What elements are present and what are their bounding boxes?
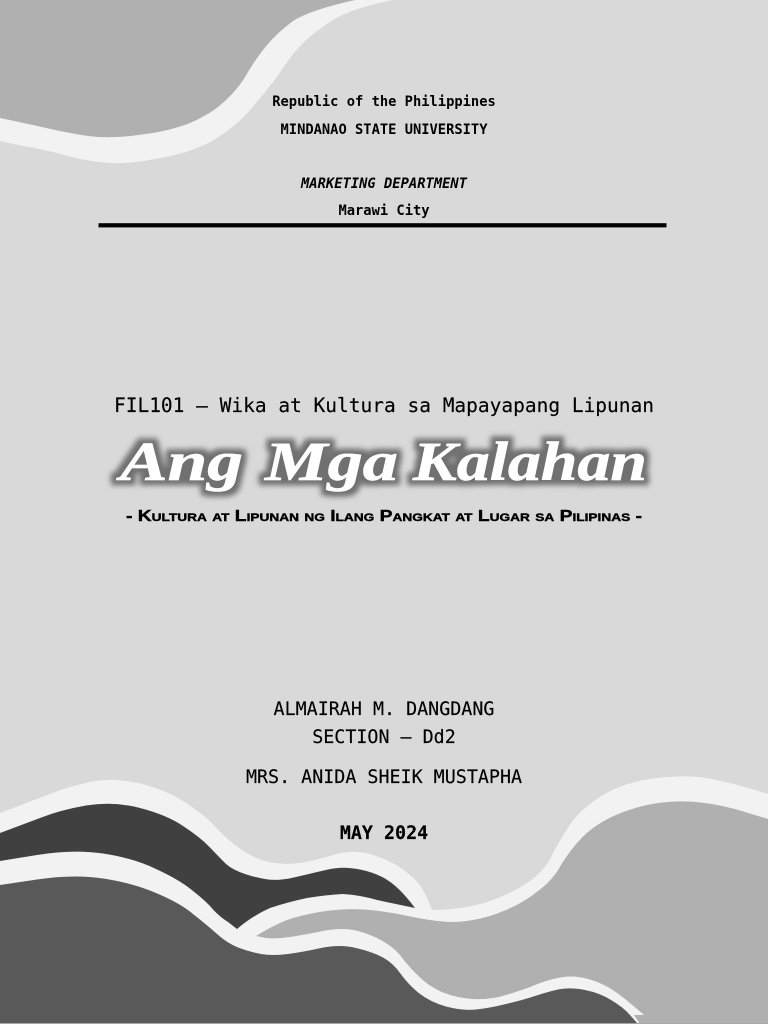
white band silhouette [0,776,768,1024]
mid grey wave [0,876,637,1024]
instructor: MRS. ANIDA SHEIK MUSTAPHA [246,767,522,788]
header: city: Marawi City [338,203,430,219]
subtitle: - Kultura at Lipunan ng Ilang Pangkat at Lugar sa Pilipinas - [126,508,642,525]
header: department: MARKETING DEPARTMENT [300,176,468,192]
author name: ALMAIRAH M. DANGDANG [274,699,494,720]
course title: FIL101 – Wika at Kultura sa Mapayapang Lipunan [114,394,654,417]
main title: Ang [116,431,243,492]
dark wave [0,804,415,929]
main title: Mga [264,431,398,492]
date: MAY 2024 [340,823,428,844]
right grey wave [256,801,768,1024]
top left wave [0,0,392,163]
main title: Kalahan [412,431,647,492]
header: university: MINDANAO STATE UNIVERSITY [281,122,488,138]
header rule [98,223,666,227]
bottom waves [0,776,768,1024]
header: Republic of the Philippines: Republic of the Philippines [272,94,496,110]
main title [116,431,647,492]
section: SECTION – Dd2 [312,727,456,748]
